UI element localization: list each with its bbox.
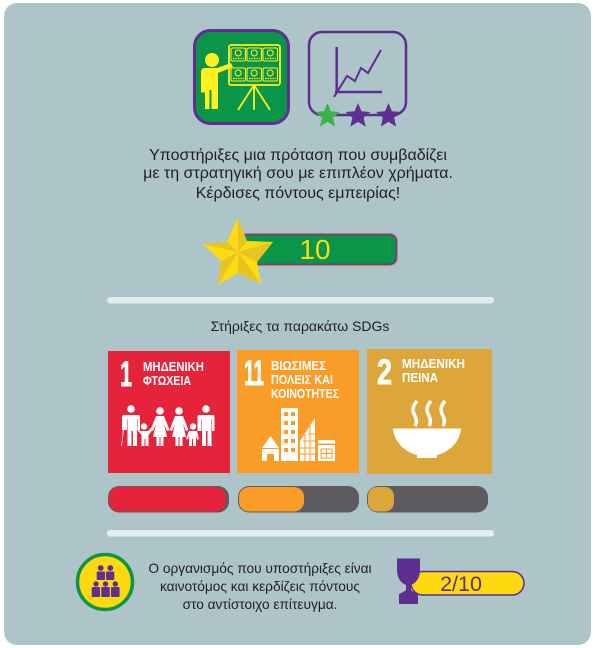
achievement text bbox=[148, 561, 372, 612]
icon: gold star bbox=[203, 218, 273, 285]
points bar: 10 bbox=[299, 234, 331, 265]
SDG tile 1 bbox=[108, 351, 230, 473]
SDG tile 11: ΠΟΛΕΙΣ ΚΑΙ bbox=[271, 373, 333, 387]
points bar bbox=[240, 234, 397, 265]
icon: family bbox=[122, 405, 214, 446]
progress bar: goal 2 bbox=[367, 486, 488, 512]
achievement bar: 2/10 bbox=[440, 572, 482, 596]
icon: trophy cup bbox=[397, 558, 420, 604]
SDG tile 1: 1 bbox=[120, 355, 132, 394]
divider bbox=[107, 530, 494, 536]
SDG tile 2: ΠΕΙΝΑ bbox=[402, 371, 438, 385]
SDG tile 2 bbox=[367, 349, 492, 474]
icon: presenter at board bbox=[194, 30, 288, 124]
icon: growth chart with stars bbox=[309, 32, 406, 127]
achievement bar bbox=[411, 572, 524, 596]
progress bar: goal 11 bbox=[238, 486, 359, 512]
SDG tile 1: ΦΤΩΧΕΙΑ bbox=[143, 374, 191, 388]
icon: purple star bbox=[376, 103, 401, 127]
SDG heading: Στήριξες τα παρακάτω SDGs bbox=[211, 318, 389, 334]
message text: Κέρδισες πόντους εμπειρίας! bbox=[196, 185, 400, 202]
SDG tile 1: ΜΗΔΕΝΙΚΗ bbox=[143, 360, 204, 374]
achievement text: στο αντίστοιχο επίτευγμα. bbox=[183, 597, 337, 612]
SDG tile 11: ΒΙΩΣΙΜΕΣ bbox=[271, 359, 326, 373]
SDG tile 2: ΜΗΔΕΝΙΚΗ bbox=[402, 357, 465, 371]
achievement text: Ο οργανισμός που υποστήριξες είναι bbox=[148, 561, 372, 576]
icon: soup bowl bbox=[393, 401, 461, 458]
icon: purple star bbox=[346, 103, 370, 127]
message text bbox=[143, 147, 453, 202]
message text: Υποστήριξες μια πρόταση που συμβαδίζει bbox=[149, 147, 447, 164]
SDG tile 11 bbox=[237, 350, 359, 473]
divider bbox=[107, 297, 494, 304]
icon: green star bbox=[315, 103, 340, 127]
message text: με τη στρατηγική σου με επιπλέον χρήματα. bbox=[143, 165, 453, 182]
icon: city bbox=[262, 408, 335, 461]
icon: community badge bbox=[78, 554, 132, 610]
SDG tile 2: 2 bbox=[377, 353, 392, 392]
progress bar: goal 1 bbox=[108, 486, 229, 512]
SDG tile 11: 11 bbox=[244, 354, 264, 393]
SDG tile 11: ΚΟΙΝΟΤΗΤΕΣ bbox=[271, 387, 339, 401]
achievement text: καινοτόμος και κερδίζεις πόντους bbox=[160, 579, 360, 594]
